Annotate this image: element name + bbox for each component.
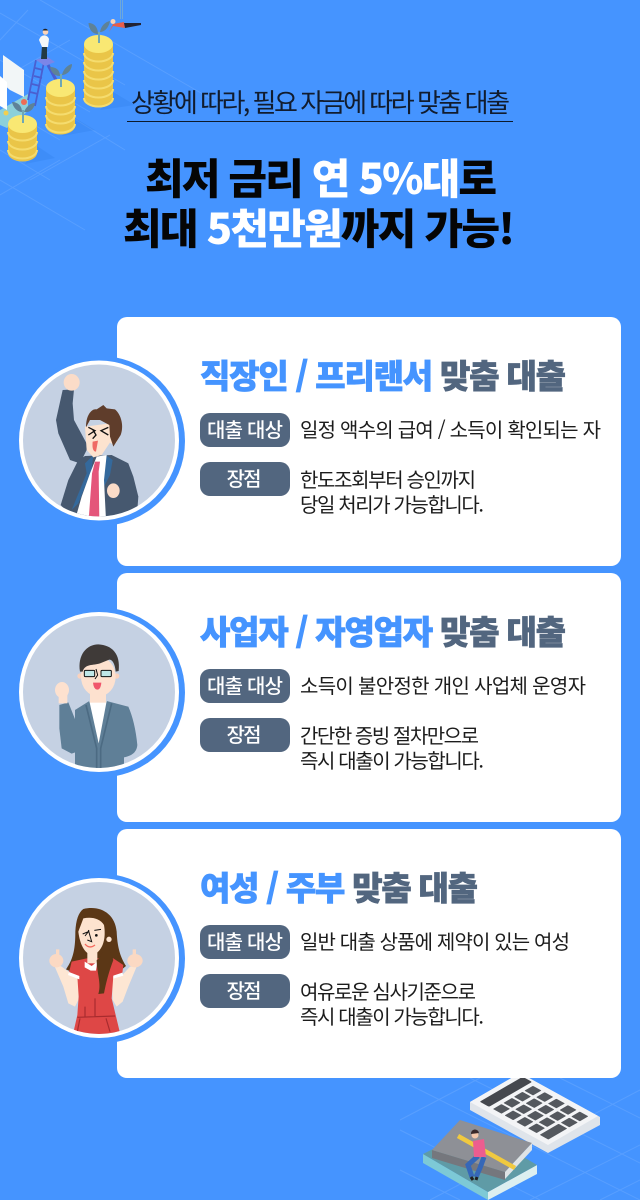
illustration: calculator and books bbox=[423, 1073, 600, 1200]
label: 장점: 장점 bbox=[226, 463, 262, 492]
subtitle: 상황에 따라, 필요 자금에 따라 맞춤 대출 bbox=[131, 83, 510, 120]
headline: 최저 금리 연 5%대로 bbox=[145, 146, 497, 207]
books bbox=[423, 1120, 537, 1200]
calculator bbox=[470, 1073, 600, 1153]
label: 대출 대상: 대출 대상 bbox=[207, 926, 283, 955]
text: 대출 대상: 소득이 불안정한 개인 사업체 운영자 bbox=[300, 670, 586, 699]
text: 장점: 당일 처리가 가능합니다. bbox=[300, 489, 484, 518]
stack 3 bbox=[8, 115, 37, 162]
card: 직장인 / 프리랜서 bbox=[15, 317, 621, 566]
avatar: woman bbox=[15, 874, 185, 1044]
shadows bbox=[25, 92, 135, 164]
stack 1 bbox=[84, 35, 113, 108]
ladder bbox=[28, 60, 44, 106]
label: 장점 bbox=[200, 462, 290, 496]
flying person bbox=[120, 0, 122, 19]
avatar: business owner bbox=[15, 608, 185, 778]
text: 대출 대상: 일반 대출 상품에 제약이 있는 여성 bbox=[300, 926, 570, 955]
text: 장점 bbox=[300, 464, 484, 518]
documents bbox=[0, 94, 28, 128]
label: 장점: 장점 bbox=[226, 719, 262, 748]
label: 장점: 장점 bbox=[226, 975, 262, 1004]
text: 장점: 즉시 대출이 가능합니다. bbox=[300, 1001, 484, 1030]
avatar: office worker bbox=[15, 356, 185, 526]
text: 장점 bbox=[300, 976, 484, 1030]
sprouts bbox=[23, 32, 99, 123]
heading: 직장인 / 프리랜서 맞춤 대출 bbox=[200, 350, 566, 398]
card: 여성 / 주부 bbox=[15, 829, 621, 1078]
label: 장점 bbox=[200, 718, 290, 752]
card: 사업자 / 자영업자 bbox=[15, 573, 621, 822]
text: 대출 대상: 일정 액수의 급여 / 소득이 확인되는 자 bbox=[300, 414, 601, 443]
stack 2 bbox=[46, 79, 75, 134]
label: 대출 대상: 대출 대상 bbox=[207, 670, 283, 699]
headline: 최대 5천만원까지 가능! bbox=[123, 196, 515, 257]
text: 장점: 여유로운 심사기준으로 bbox=[300, 976, 476, 1005]
heading: 사업자 / 자영업자 맞춤 대출 bbox=[200, 606, 566, 654]
illustration: coins and growth bbox=[0, 0, 141, 164]
heading: 여성 / 주부 맞춤 대출 bbox=[200, 862, 478, 910]
person on ladder bbox=[41, 46, 47, 59]
text: 장점: 간단한 증빙 절차만으로 bbox=[300, 720, 479, 749]
text: 장점 bbox=[300, 720, 484, 774]
person with pencil bbox=[458, 1129, 515, 1180]
label: 장점 bbox=[200, 974, 290, 1008]
label: 대출 대상: 대출 대상 bbox=[207, 414, 283, 443]
headline bbox=[123, 146, 515, 257]
text: 장점: 한도조회부터 승인까지 bbox=[300, 464, 476, 493]
text: 장점: 즉시 대출이 가능합니다. bbox=[300, 745, 484, 774]
